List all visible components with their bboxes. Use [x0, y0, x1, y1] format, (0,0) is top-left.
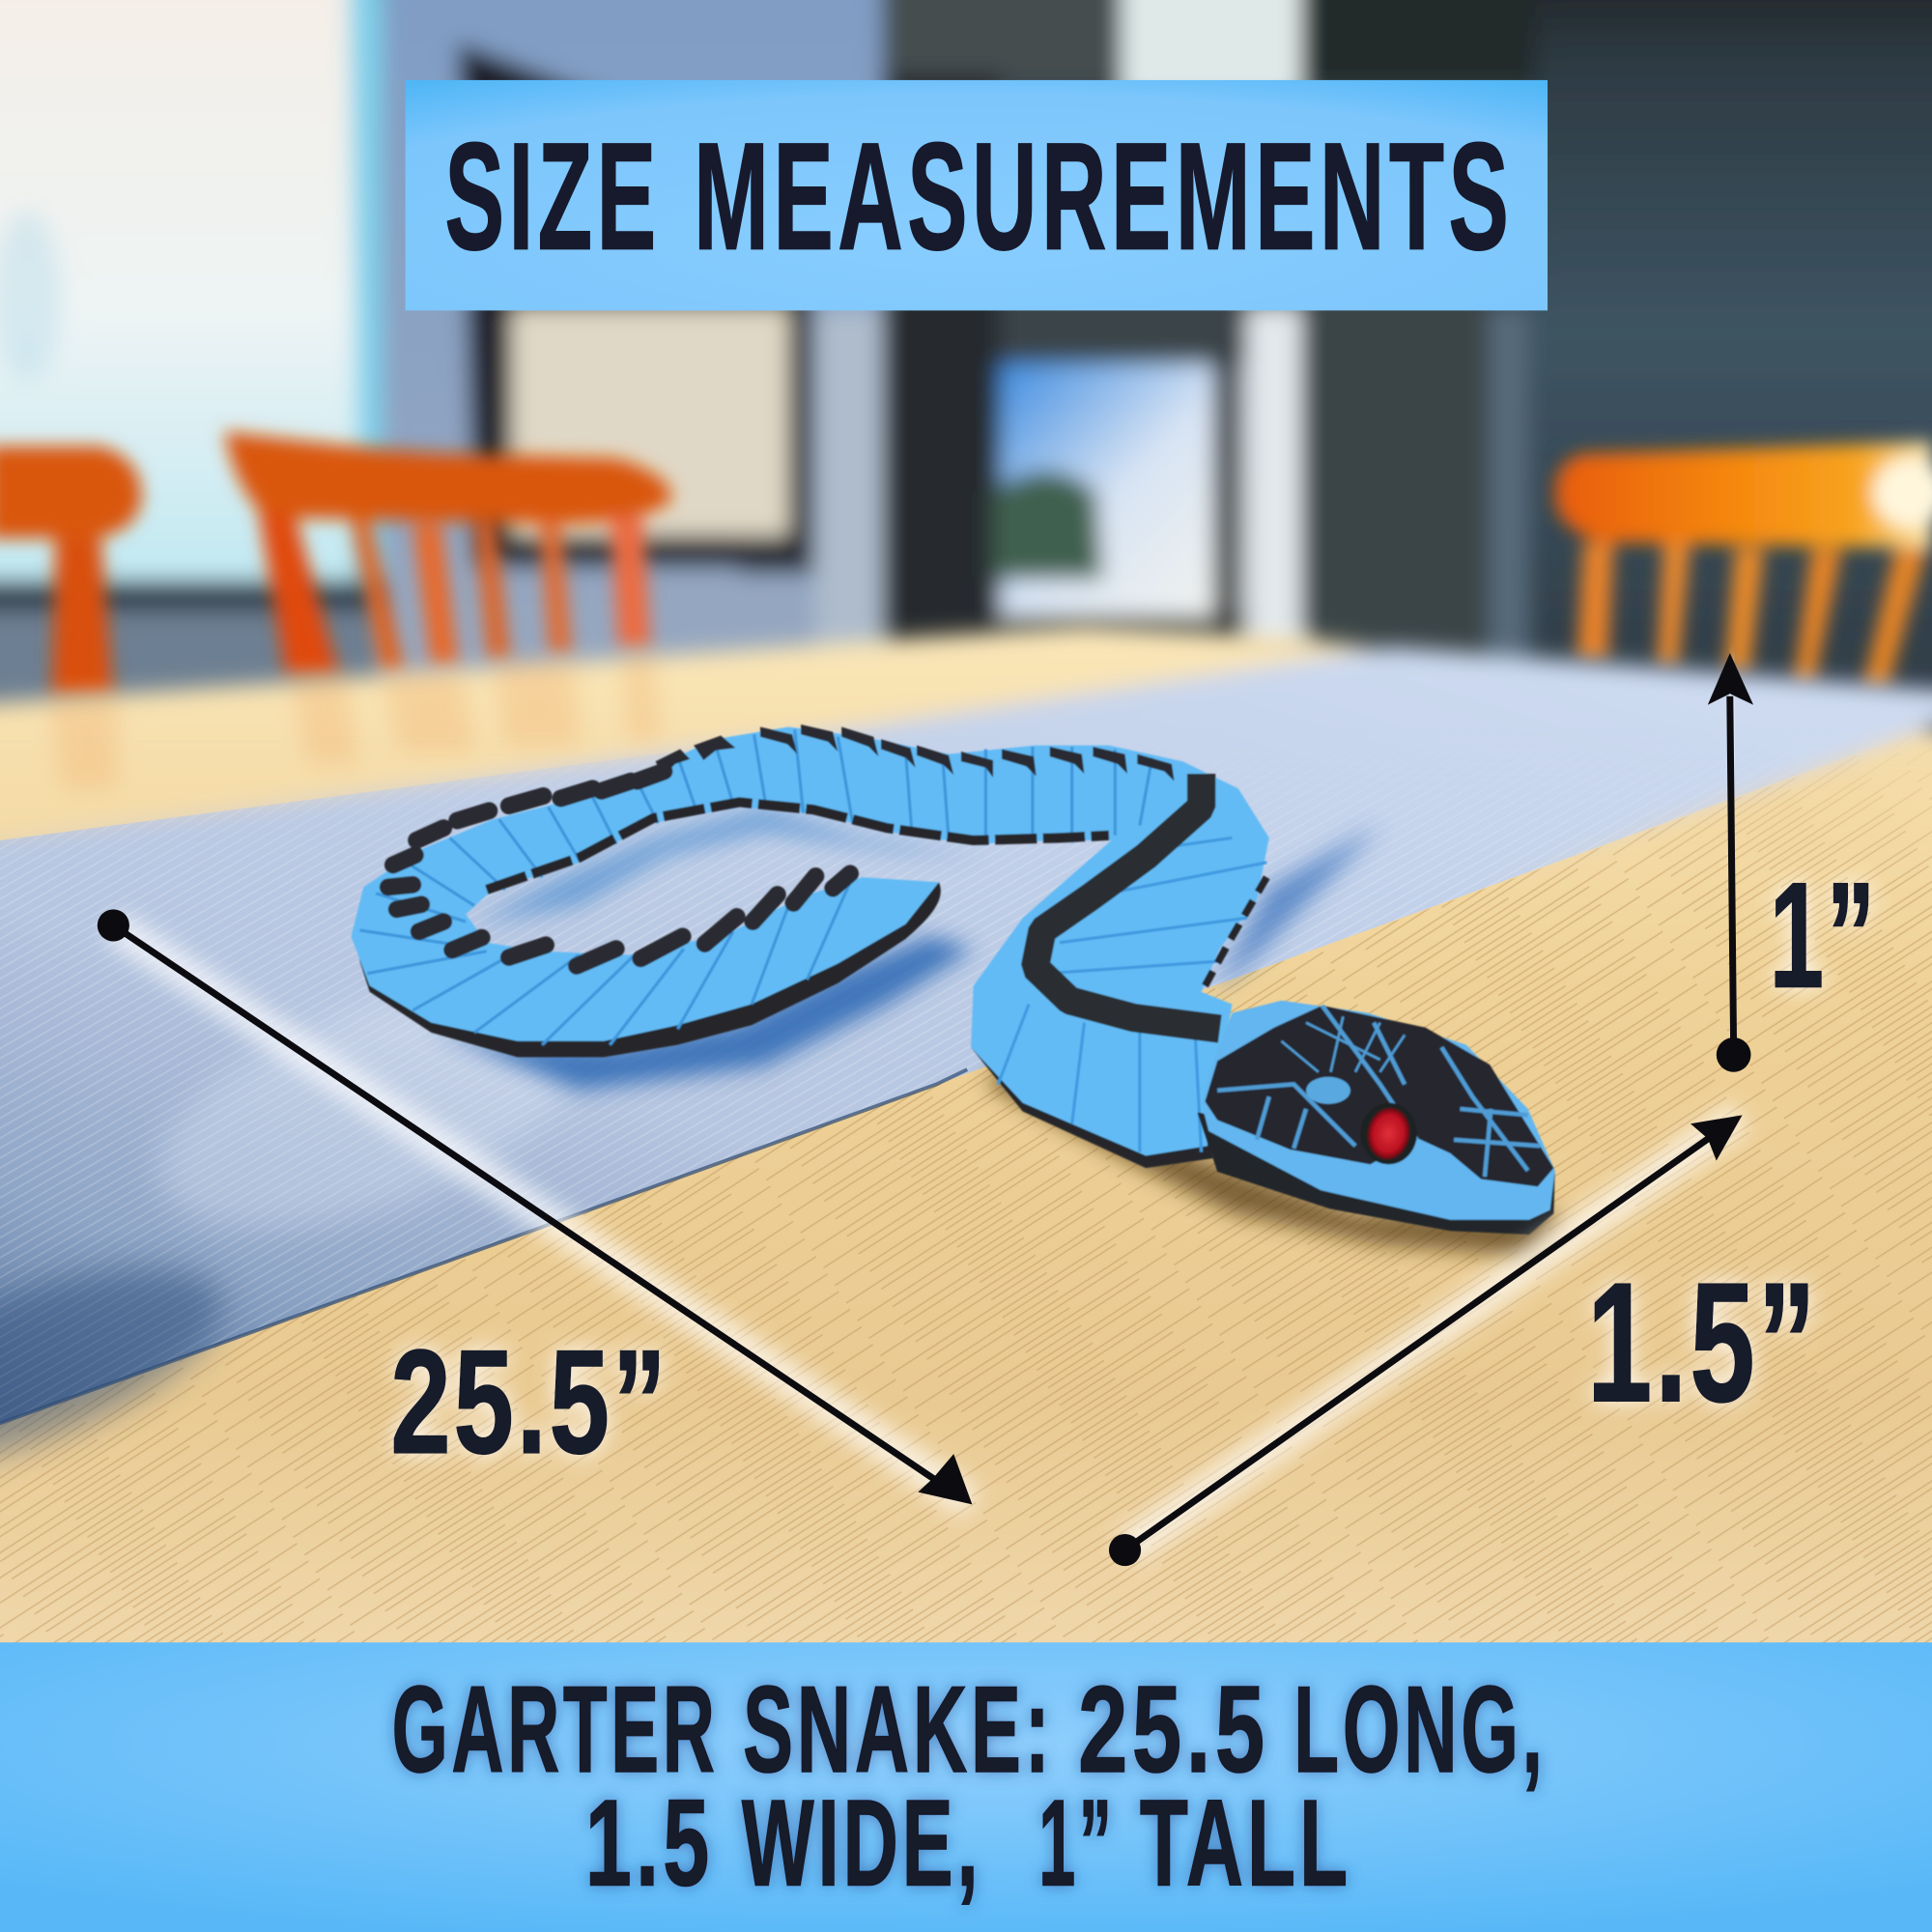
table and runner: [0, 626, 1932, 1658]
chairs: orange blurred chairs: [0, 431, 1932, 696]
snake head: [1198, 1001, 1555, 1235]
bottom text line 1: GARTER: [392, 1662, 719, 1799]
bottom text line 1: 25.5: [1078, 1662, 1269, 1799]
snake neck plates: [998, 838, 1266, 1152]
bottom text line 2: TALL: [1140, 1776, 1351, 1913]
snake: articulated blue body: [352, 724, 1269, 1168]
arrow: width 1.5: [1109, 1115, 1743, 1566]
snake body blue: [352, 727, 1269, 1155]
dimension label: 1: 1”: [1770, 851, 1878, 1019]
dimension label: 25.5: 25.5”: [390, 1320, 669, 1485]
snake body underside: [357, 882, 1213, 1168]
arrow: height 1: [1708, 653, 1753, 1072]
snake loop ridge tips: [388, 771, 850, 966]
bottom text line 1: SNAKE:: [743, 1662, 1054, 1799]
snake dorsal stripe: [1035, 774, 1220, 1029]
head underside: [1198, 1113, 1555, 1235]
bottom text line 2: [585, 1776, 1351, 1913]
head blue patch: [1306, 1077, 1350, 1104]
bottom text line 2: WIDE,: [742, 1776, 982, 1913]
snake inner edge: [487, 802, 1109, 890]
snake right edge: [1205, 877, 1266, 985]
snake shadows: [431, 807, 1565, 1257]
snake plate separators: [359, 729, 1152, 1045]
background: blurred room: [0, 0, 1932, 752]
title text: [444, 111, 1513, 282]
title banner: [406, 80, 1548, 310]
snake top ridge wedges: [656, 724, 1175, 781]
bottom text line 2: 1.5: [585, 1776, 714, 1913]
head dark cap: [1205, 1006, 1553, 1186]
dimension label: 1.5: 1.5”: [1587, 1248, 1819, 1437]
bottom text line 1: [392, 1662, 1547, 1799]
bottom band: [0, 1642, 1932, 1932]
head fine scale web: [1282, 1016, 1405, 1072]
head blue: [1202, 1001, 1555, 1220]
snake eye: [1360, 1103, 1417, 1164]
bottom text line 1: LONG,: [1293, 1662, 1547, 1799]
head blue web lines: [1217, 1006, 1540, 1177]
title text: SIZE: [444, 111, 661, 282]
bottom text line 2: 1”: [1038, 1776, 1115, 1913]
arrow: length 25.5: [98, 909, 972, 1504]
